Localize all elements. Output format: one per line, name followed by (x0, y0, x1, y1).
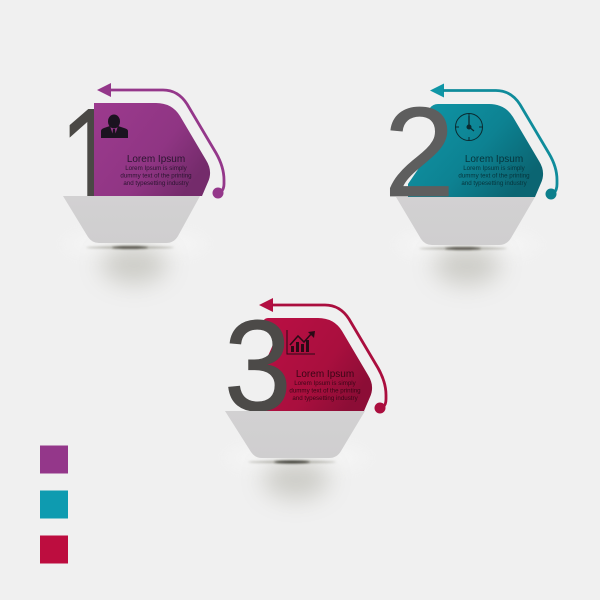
module 3 text: Lorem Ipsum (296, 369, 354, 380)
module 1 shadow (63, 234, 207, 284)
swatch: teal (40, 490, 68, 518)
module 3 arrow (259, 298, 386, 414)
module 3 shadow (225, 448, 369, 499)
module 2 text: Lorem Ipsum is simply (463, 165, 526, 172)
module 3 (224, 294, 386, 499)
module 2 shadow (396, 235, 540, 285)
module 2 arrow (430, 84, 557, 200)
swatch: purple (40, 446, 68, 474)
module 2 text: and typesetting industry (461, 180, 528, 187)
module 3 text: and typesetting industry (292, 395, 359, 402)
module 1 text: and typesetting industry (123, 180, 190, 187)
module 2 text: dummy text of the printing (458, 172, 530, 180)
module 2 text (458, 154, 530, 187)
module 3 icon: chart (287, 330, 315, 354)
module 1 text (120, 154, 192, 187)
module 3 panel (263, 318, 372, 411)
module 1 text: Lorem Ipsum is simply (125, 165, 188, 172)
module 2 panel (408, 104, 543, 197)
module 2 text: Lorem Ipsum (465, 154, 523, 165)
legend swatches (40, 446, 68, 564)
module 1 panel (94, 103, 210, 196)
module 1 text: Lorem Ipsum (127, 154, 185, 165)
module 3 text: dummy text of the printing (289, 388, 361, 394)
module 3 base (225, 411, 365, 458)
module 2 (384, 81, 557, 285)
module 3 text: Lorem Ipsum is simply (294, 380, 357, 387)
module 1 icon: person (101, 114, 128, 138)
module 1 arrow (97, 83, 224, 198)
module 1 numeral: 1 (59, 80, 122, 238)
module 1 text: dummy text of the printing (120, 172, 192, 180)
module 1 (59, 80, 224, 284)
module 2 base (396, 197, 535, 245)
module 3 text (289, 369, 361, 402)
module 2 numeral: 2 (384, 81, 455, 223)
module 1 base (63, 196, 200, 243)
module 3 numeral: 3 (224, 294, 291, 438)
swatch: crimson (40, 536, 68, 564)
module 2 icon: clock (456, 114, 482, 140)
